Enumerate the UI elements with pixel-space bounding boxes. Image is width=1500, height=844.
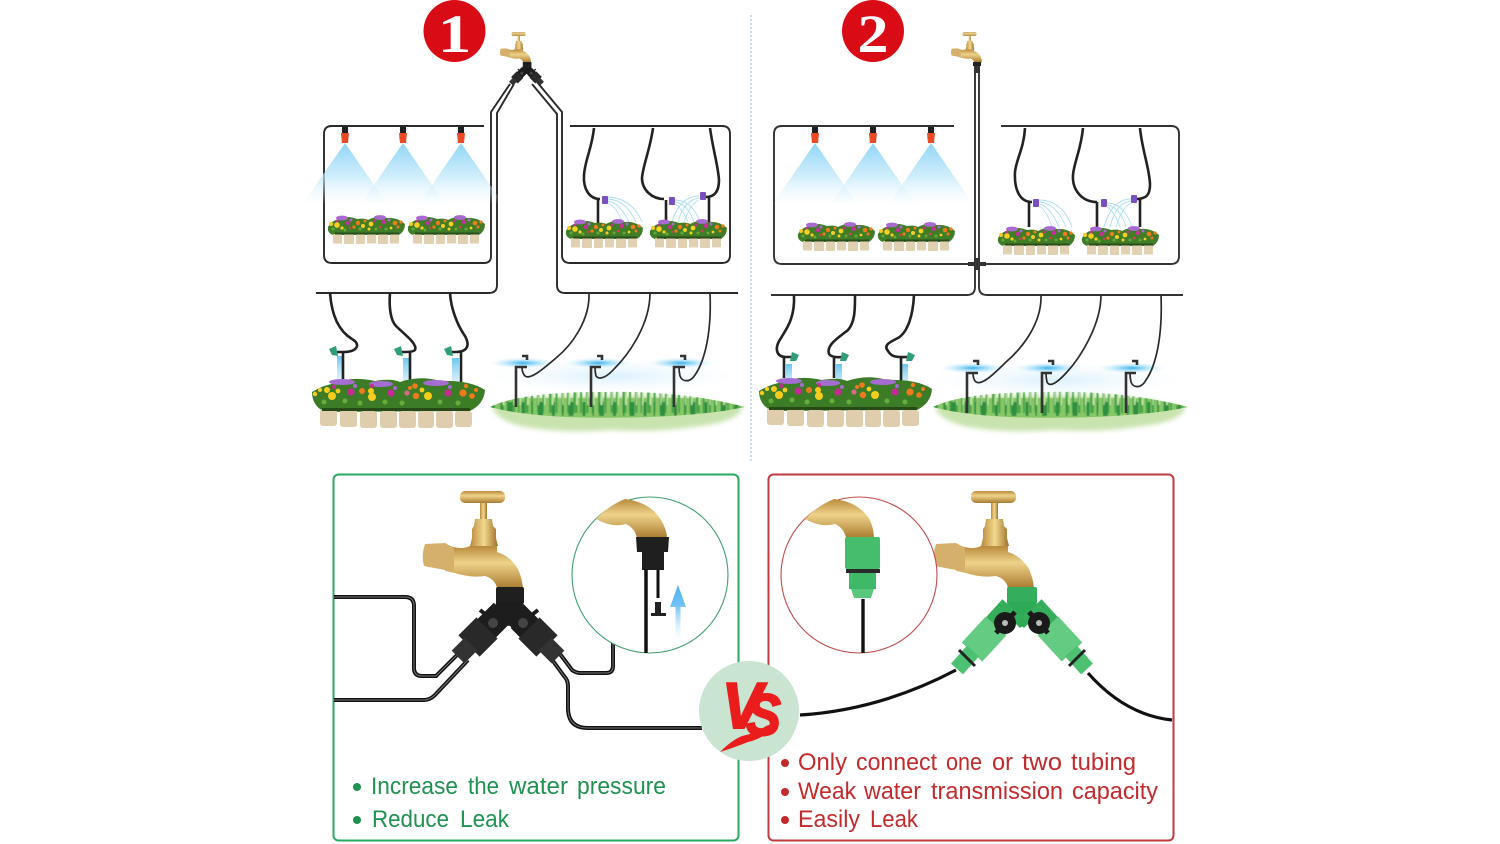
icon: green Y connector xyxy=(957,587,1087,669)
lawn sprinkler stakes with mist xyxy=(487,293,737,407)
purple drippers with hanging tubes xyxy=(1015,128,1150,227)
divider: dotted centre line xyxy=(750,15,752,462)
panel: diagram 1 with Y connector xyxy=(302,0,748,431)
panel: green recommended setup xyxy=(334,474,738,840)
tubing: diagram 2 network xyxy=(771,66,1183,295)
green nozzle stakes xyxy=(777,295,915,392)
text: green benefits: the xyxy=(468,773,499,800)
purple drippers with hanging tubes xyxy=(584,128,719,223)
text: green benefits: Increase xyxy=(371,773,458,800)
flower planter: bottom left xyxy=(312,378,485,428)
tube xyxy=(861,599,865,653)
icon: faucet with black Y connector xyxy=(500,32,542,84)
icon: tee connector xyxy=(968,258,986,270)
green nozzle stakes xyxy=(329,293,468,386)
grass patch xyxy=(488,395,748,431)
infographic: tubing connection comparison xyxy=(308,0,1188,842)
badge: number 2: 2 xyxy=(857,4,889,64)
barb connector xyxy=(651,602,666,616)
grass patch xyxy=(931,395,1191,431)
badge: number 1 xyxy=(424,0,486,64)
spout close-up xyxy=(596,499,667,538)
mist cones and red sprinklers xyxy=(772,127,974,205)
brush tail xyxy=(720,722,778,752)
text: red drawbacks: transmission xyxy=(931,778,1063,805)
tubing: diagram 1 network xyxy=(316,82,738,293)
text: red drawbacks: two xyxy=(1022,749,1062,776)
badge: VS: V xyxy=(722,670,767,742)
text: green benefits: Reduce xyxy=(372,806,449,833)
mist cones and red sprinklers xyxy=(302,127,504,205)
text: green benefits xyxy=(353,773,666,833)
tubes and barb xyxy=(646,569,658,653)
icon: faucet with straight connector xyxy=(951,32,982,73)
icon: brass faucet xyxy=(934,491,1034,588)
badge: number 2 xyxy=(842,0,904,64)
text: red drawbacks: connect xyxy=(856,749,937,776)
text: red drawbacks: Only xyxy=(798,749,847,776)
flower planters: top right xyxy=(566,219,727,248)
arrow: push up xyxy=(670,585,686,637)
green coupling xyxy=(845,537,880,598)
panel: red not recommended setup xyxy=(768,474,1174,840)
flower planters: top left xyxy=(328,215,485,244)
inset: close-up of green connector xyxy=(781,497,937,653)
panel: diagram 2 with straight connector xyxy=(759,0,1191,431)
black coupling xyxy=(636,537,669,570)
text: red drawbacks: Leak xyxy=(870,806,919,833)
flower planters: top left xyxy=(798,222,955,251)
text: red drawbacks: capacity xyxy=(1072,778,1158,805)
inset: close-up of connector xyxy=(572,497,728,653)
text: green benefits: pressure xyxy=(577,773,666,800)
text: green benefits: water xyxy=(508,773,568,800)
text: red drawbacks xyxy=(781,749,1158,833)
text: green benefits: Leak xyxy=(460,806,510,833)
text: red drawbacks: one xyxy=(946,749,982,776)
badge: VS xyxy=(699,661,799,761)
tubing: two black lines xyxy=(800,670,1172,720)
lawn sprinkler stakes with mist xyxy=(931,295,1181,413)
text: red drawbacks: Weak xyxy=(798,778,857,805)
text: red drawbacks: tubing xyxy=(1071,749,1136,776)
flower planters: top right xyxy=(998,226,1159,255)
tubing: four black lines xyxy=(334,597,702,728)
badge: number 1: 1 xyxy=(438,5,471,64)
text: red drawbacks: or xyxy=(992,749,1013,776)
flower planter: bottom left xyxy=(759,377,932,427)
spout close-up xyxy=(805,499,874,538)
text: red drawbacks: water xyxy=(863,778,921,805)
text: red drawbacks: Easily xyxy=(798,806,860,833)
icon: brass faucet with black Y connector xyxy=(423,491,558,657)
badge: VS: S xyxy=(746,682,781,748)
